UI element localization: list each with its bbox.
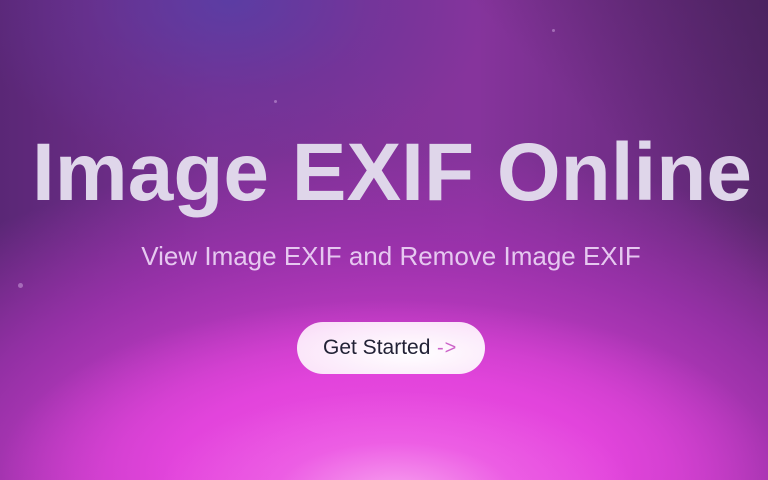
button: get started [297,322,485,374]
title: Image EXIF Online [32,127,752,218]
button: get started: -> [437,337,457,359]
button: get started: Get Started [323,336,430,359]
subtitle: View Image EXIF and Remove Image EXIF [141,241,641,271]
star particle [552,29,555,32]
star particle [18,283,23,288]
star particle [274,100,277,103]
